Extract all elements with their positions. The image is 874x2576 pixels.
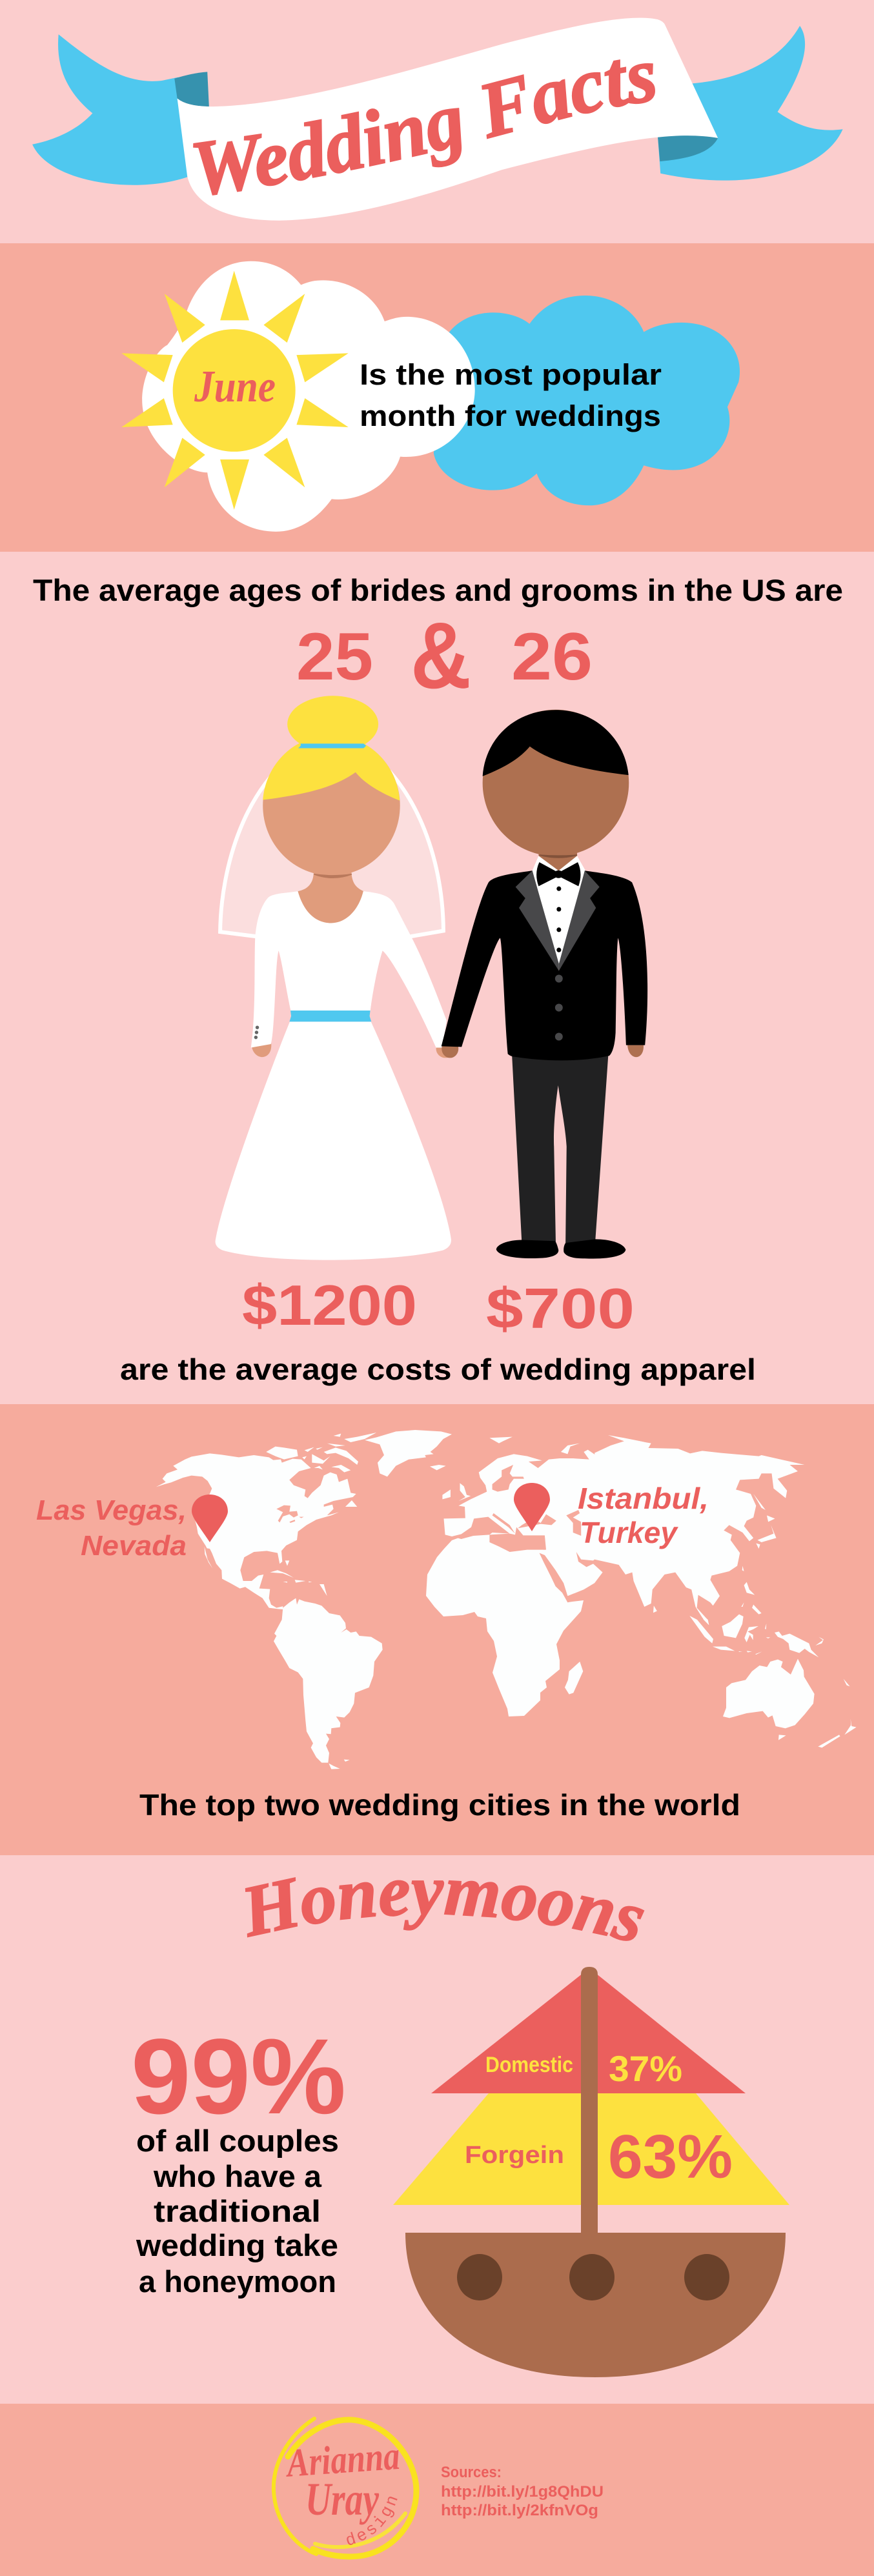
sail: domestic bbox=[431, 1968, 746, 2093]
text: couples who take a honeymoon: who have a bbox=[153, 2159, 322, 2193]
portholes bbox=[457, 2254, 729, 2300]
bow tie bbox=[536, 862, 580, 886]
South America bbox=[274, 1598, 583, 1769]
value: 63%: 63% bbox=[608, 2122, 733, 2191]
logo tagline: design bbox=[347, 2497, 398, 2545]
trousers bbox=[512, 1056, 608, 1243]
sources: http://bit.ly/2kfnVOg bbox=[441, 2502, 598, 2519]
sources: http://bit.ly/1g8QhDU bbox=[441, 2483, 604, 2501]
ages: 25 and 26: 26 bbox=[511, 619, 593, 694]
chart: sailboat domestic vs foreign bbox=[393, 1967, 789, 2377]
label: Forgein: Forgein bbox=[465, 2142, 564, 2169]
belt bbox=[289, 1011, 371, 1021]
ages: 25 and 26: 25 bbox=[296, 619, 373, 694]
Americas and Greenland bbox=[156, 1430, 452, 1609]
figure: bride bbox=[216, 696, 455, 1260]
lapels bbox=[516, 870, 559, 971]
text: couples who take a honeymoon: wedding take bbox=[136, 2228, 338, 2262]
label: Istanbul, Turkey: Istanbul, bbox=[578, 1482, 709, 1515]
label: Las Vegas, Nevada bbox=[36, 1494, 187, 1562]
stat: 99%: 99% bbox=[131, 2017, 346, 2137]
label: June: June bbox=[194, 362, 276, 412]
price: $1200: $1200 bbox=[242, 1273, 417, 1337]
sources bbox=[441, 2464, 604, 2519]
ages: 25 and 26: & bbox=[411, 603, 471, 708]
jacket buttons bbox=[555, 975, 563, 1041]
Eurasia bbox=[442, 1435, 804, 1625]
text: couples who take a honeymoon bbox=[136, 2124, 339, 2299]
inland and enclosed seas bbox=[452, 1465, 584, 1602]
logo name: Arianna bbox=[283, 2434, 401, 2486]
dress bodice and sleeves bbox=[251, 891, 447, 1048]
text: most popular month: Is the most popular bbox=[360, 358, 662, 391]
text: couples who take a honeymoon: traditional bbox=[154, 2194, 321, 2228]
Africa bbox=[426, 1533, 584, 1716]
label: Las Vegas, Nevada: Nevada bbox=[81, 1530, 187, 1562]
Great Lakes bbox=[276, 1505, 304, 1523]
heading: Honeymoons: Honeymoons bbox=[245, 1877, 644, 1941]
ages: 25 and 26 bbox=[296, 603, 593, 708]
hands bbox=[252, 1043, 271, 1057]
logo: Arianna Uray design bbox=[271, 2417, 420, 2559]
hair bun bbox=[287, 696, 378, 752]
world map bbox=[156, 1430, 857, 1769]
panel: honeymoons bbox=[131, 1877, 789, 2377]
panel: title banner bbox=[32, 18, 843, 221]
hands bbox=[442, 1040, 458, 1058]
hair tie bbox=[298, 743, 366, 748]
logo ring bbox=[274, 2419, 416, 2557]
text: couples who take a honeymoon: of all couples bbox=[136, 2124, 339, 2158]
Madagascar bbox=[565, 1662, 583, 1695]
hull bbox=[405, 2233, 786, 2377]
head bbox=[483, 710, 629, 856]
figure: groom bbox=[442, 710, 647, 1258]
text: couples who take a honeymoon: a honeymoon bbox=[139, 2264, 336, 2299]
mast bbox=[581, 1967, 598, 2234]
title: Wedding Facts: Wedding Facts bbox=[193, 59, 655, 196]
caption: apparel costs: are the average costs of wedding apparel bbox=[120, 1353, 756, 1386]
sources: Sources: bbox=[441, 2464, 502, 2481]
cuff buttons bbox=[254, 1026, 259, 1039]
head bbox=[263, 736, 400, 876]
panel: ages and apparel bbox=[0, 552, 874, 1404]
skirt bbox=[216, 1021, 451, 1260]
price: $700: $700 bbox=[486, 1276, 635, 1340]
label: Istanbul, Turkey bbox=[578, 1482, 709, 1549]
label: Las Vegas, Nevada: Las Vegas, bbox=[36, 1494, 187, 1526]
panel: most popular month bbox=[0, 243, 874, 552]
sail: foreign bbox=[393, 2093, 789, 2205]
caption: top two cities: The top two wedding cities in the world bbox=[139, 1788, 740, 1822]
logo: Arianna Uray design: Uray bbox=[305, 2473, 380, 2525]
icon: sun bbox=[121, 271, 349, 510]
label: Istanbul, Turkey: Turkey bbox=[580, 1516, 678, 1549]
text: most popular month: month for weddings bbox=[360, 399, 661, 432]
shirt studs bbox=[556, 887, 561, 952]
veil bbox=[220, 750, 443, 936]
panel: top wedding cities bbox=[0, 1404, 874, 1855]
icon: white cloud bbox=[142, 261, 475, 532]
heading: average ages: The average ages of brides and grooms in the US are bbox=[33, 573, 843, 607]
hair bbox=[263, 735, 400, 801]
Australia and Indonesia bbox=[689, 1613, 857, 1747]
jacket bbox=[442, 870, 647, 1060]
banner ribbon bbox=[32, 18, 843, 221]
hair bbox=[483, 710, 629, 776]
neck bbox=[538, 852, 577, 874]
text: most popular month bbox=[360, 358, 662, 432]
pin: Las Vegas bbox=[192, 1494, 228, 1542]
shoes bbox=[496, 1240, 558, 1258]
panel: footer bbox=[0, 2404, 874, 2576]
collar and shirt bbox=[533, 856, 585, 967]
clouds and sun bbox=[121, 261, 740, 532]
value: 37%: 37% bbox=[609, 2048, 682, 2089]
pin: Istanbul bbox=[514, 1483, 550, 1531]
label: Domestic: Domestic bbox=[485, 2053, 573, 2077]
icon: blue cloud bbox=[434, 296, 740, 505]
